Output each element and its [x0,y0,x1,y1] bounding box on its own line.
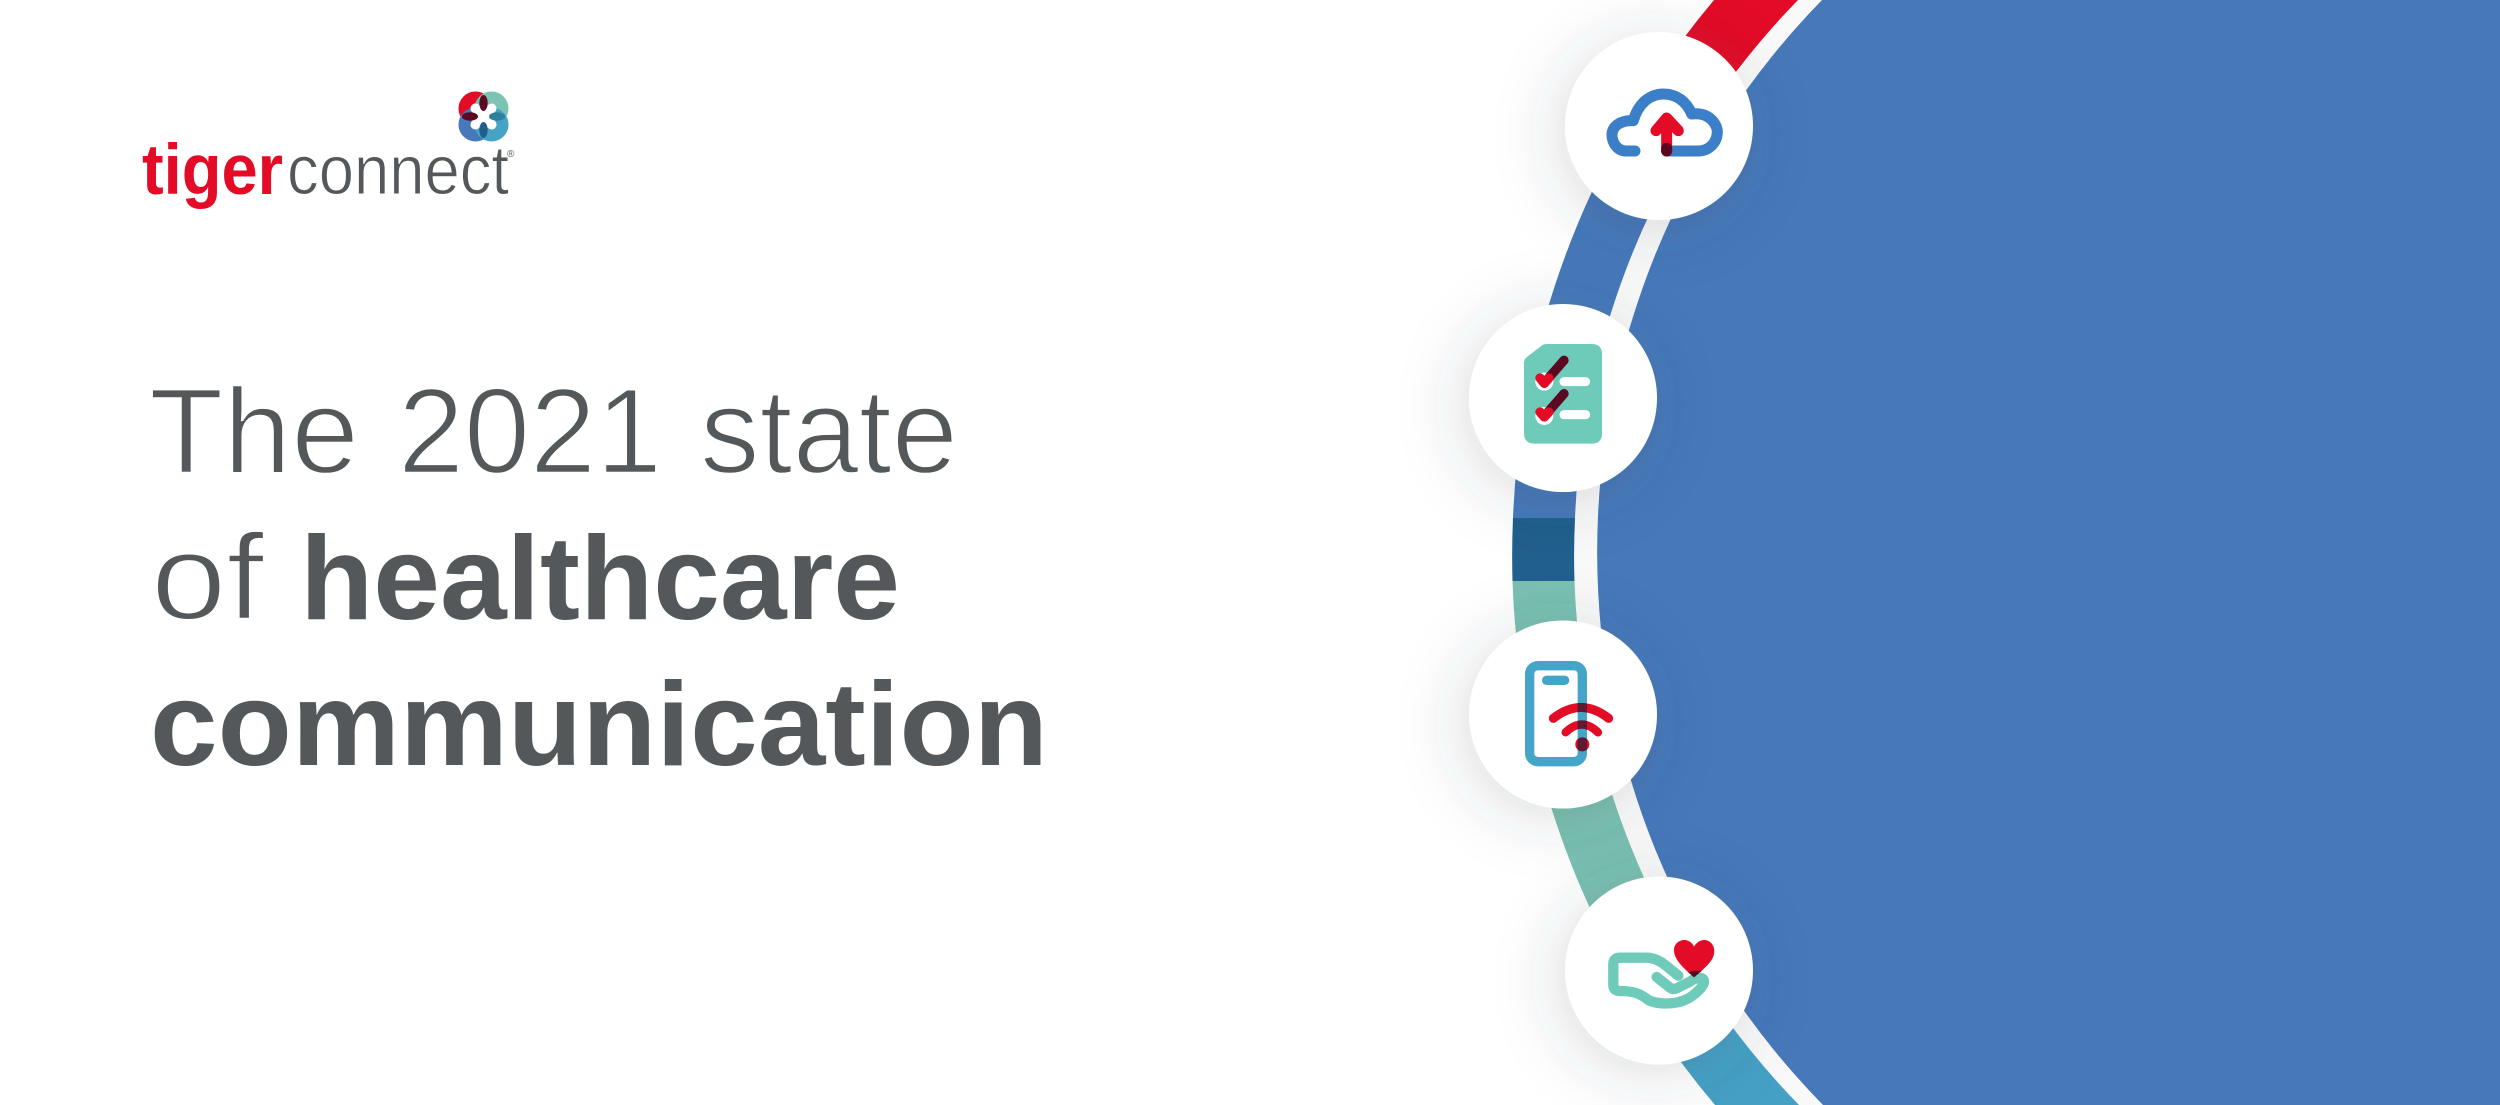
logo mark: four linked rings [462,95,505,138]
logo: tigerconnect [142,95,515,210]
icon: checklist document [1524,344,1602,444]
segmented ring [1512,0,1799,1105]
title line 2: healthcare [300,512,900,645]
node: cloud upload [1565,32,1753,220]
big blue circle [1574,0,2500,1105]
icon: cloud upload [1612,94,1717,151]
title line 3: communication [150,658,1048,791]
title [149,363,1048,791]
title line 1: state [700,363,958,499]
title line 1: 2021 [398,363,662,499]
title line 1: The [149,363,359,499]
logo wordmark: ® [507,149,515,160]
node: mobile wifi [1469,620,1657,808]
title line 2: of [151,509,265,645]
logo wordmark: tiger [142,131,283,210]
node: checklist [1469,304,1657,492]
icon: phone with wifi [1530,666,1609,762]
title line 1 [149,363,958,499]
icon: hand holding heart [1613,940,1714,1003]
node: caring hand [1565,876,1753,1064]
logo wordmark: connect [287,131,509,209]
logo wordmark [142,131,515,210]
